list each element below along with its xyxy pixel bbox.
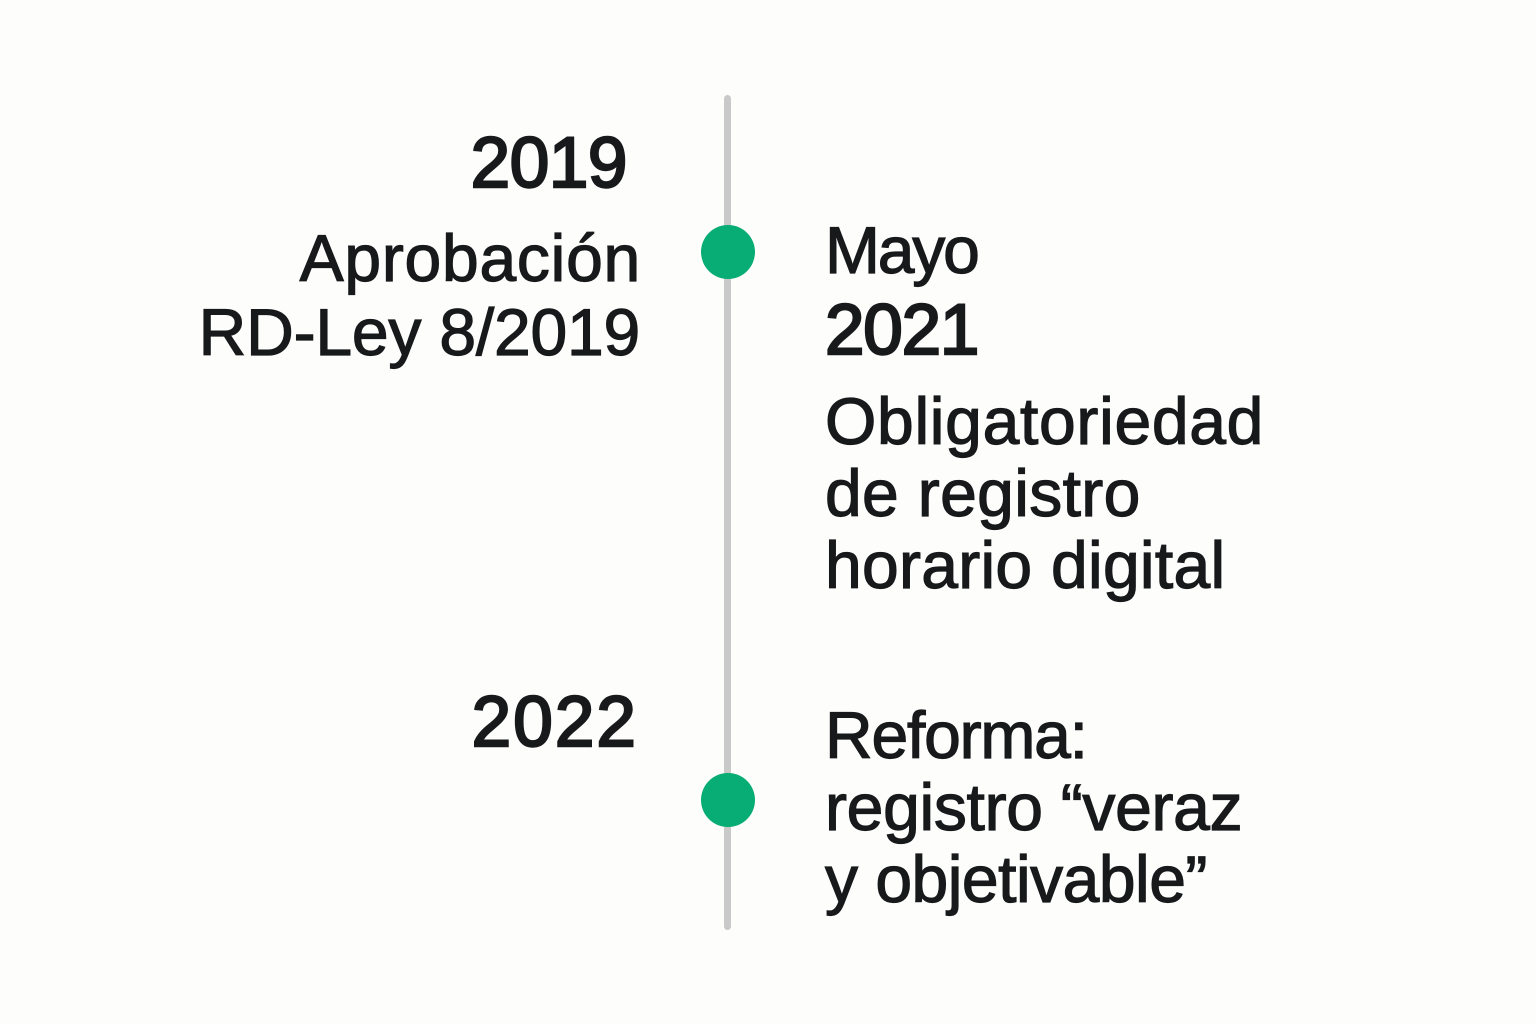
text: Obligatoriedad de registro horario digital: horario digital [825,528,1225,602]
timeline marker: 2022 [701,773,755,827]
year: 2019: 2019 [471,124,627,203]
text: Aprobación RD-Ley 8/2019: RD-Ley 8/2019 [199,295,640,369]
text: Obligatoriedad de registro horario digital: de registro [825,456,1141,530]
text: Aprobación RD-Ley 8/2019: Aprobación [300,221,641,295]
text: Reforma registro veraz y objetivable: y objetivable” [825,842,1207,916]
year: 2022: 2022 [472,683,638,762]
text: Reforma registro veraz y objetivable: registro “veraz [825,770,1242,844]
text: Aprobación RD-Ley 8/2019 [199,221,641,370]
timeline vertical line [724,95,731,930]
text: Reforma registro veraz y objetivable [824,698,1242,916]
text: Obligatoriedad de registro horario digital [825,384,1264,602]
year: 2021: 2021 [825,291,978,370]
label: Mayo: Mayo [825,213,978,287]
text: Obligatoriedad de registro horario digital: Obligatoriedad [825,384,1264,458]
timeline marker: 2019 [701,225,755,279]
text: Reforma registro veraz y objetivable: Reforma: [825,698,1087,772]
